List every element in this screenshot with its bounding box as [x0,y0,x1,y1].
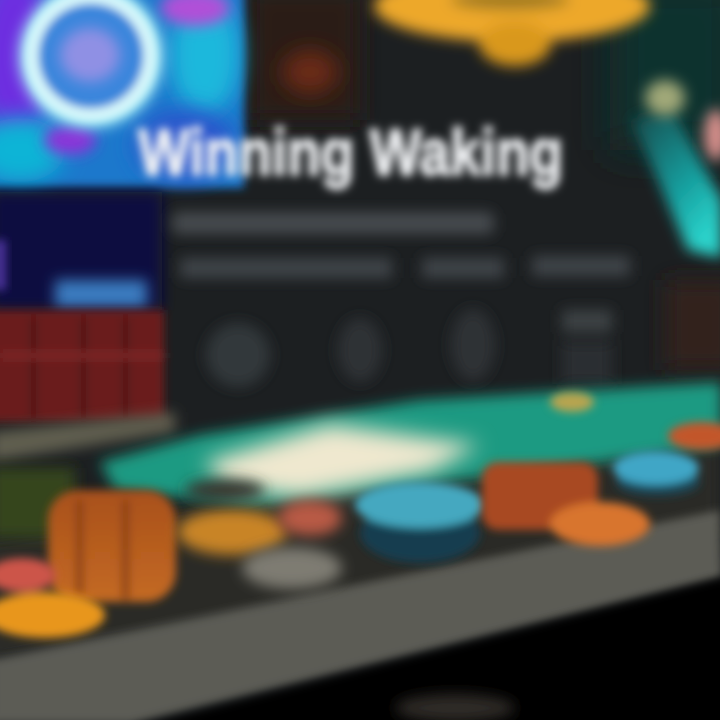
subtitle text line [172,212,494,234]
title: Winning Waking [138,115,563,189]
chips: dark and pink [185,479,342,536]
chips: grey stack [242,547,342,589]
panel: navy block under poster [0,192,162,310]
lower shape in shadow [395,694,515,720]
poker table: teal felt [100,382,720,505]
icon: glowing ring [31,0,151,116]
icon row: four blurred symbols [206,309,612,387]
chips: orange-red stack [482,462,650,546]
table edge [0,510,720,720]
top centre: gold chandelier [374,0,650,66]
text row [180,256,630,278]
table front: black [125,576,720,720]
chips: dark green at left [0,468,75,538]
panel: red chip stack wall [0,310,165,422]
chips: blue stack [613,451,700,496]
white felt highlight [205,424,480,497]
panel: neon poster top left [0,0,244,188]
top centre: orange glow [282,50,338,94]
chips: red and yellow bottom left [0,558,105,638]
chips: orange far right [668,422,720,450]
background: dark teal top right [610,0,720,150]
right: teal light streak [632,80,720,370]
wall ledge [0,412,175,462]
table surface: dark rail [0,440,720,660]
background: warm dark top centre [250,0,360,120]
chips: large orange stack [48,490,176,602]
chips: orange flat stack [177,509,287,555]
chips: teal stack [355,482,485,563]
